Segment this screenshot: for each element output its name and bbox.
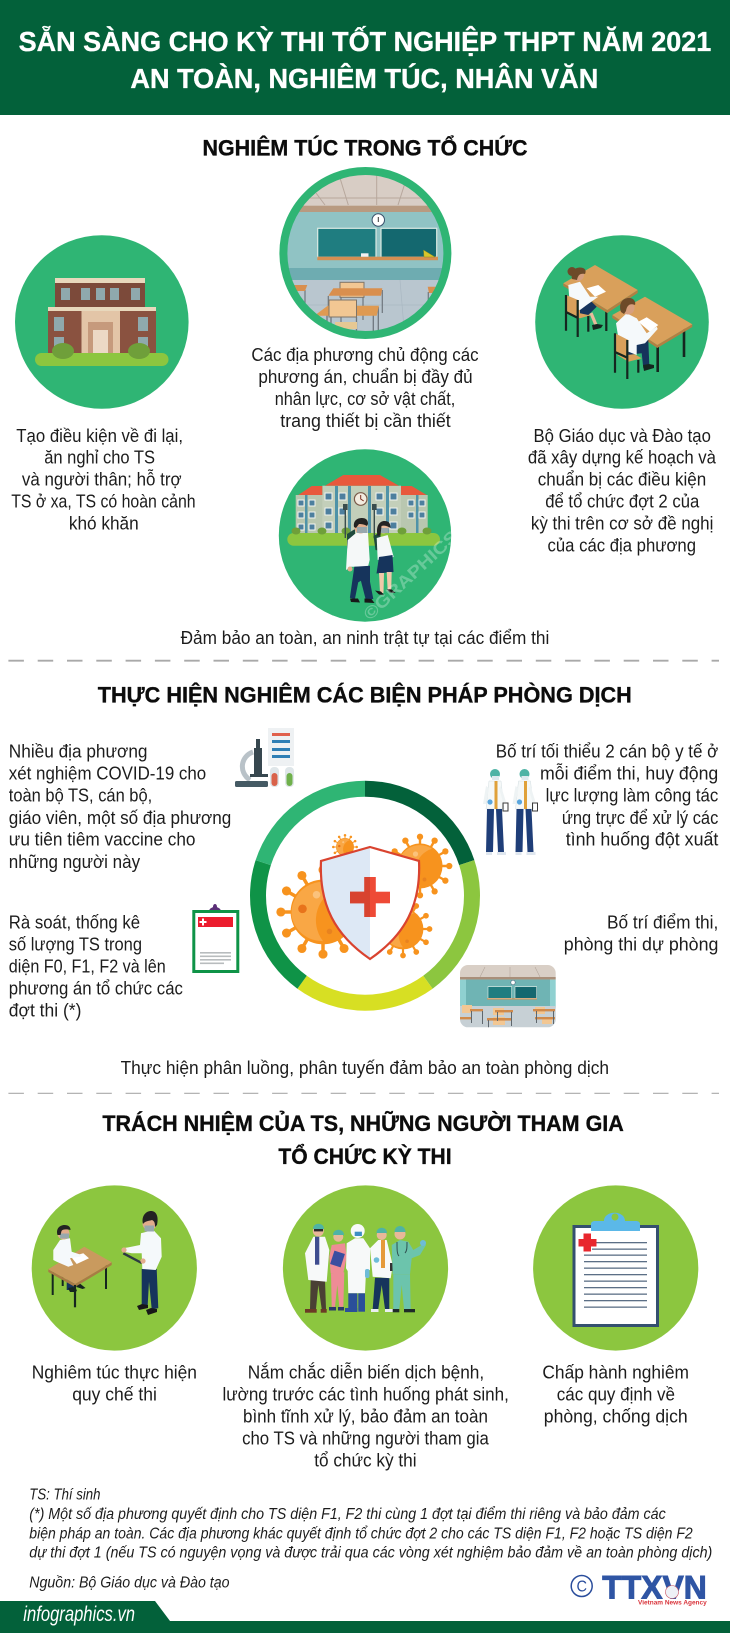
text: medical staff: ứng trực để xử lý các xyxy=(562,808,718,828)
icon: classroom circle xyxy=(279,167,452,340)
text: screening: phương án tổ chức các xyxy=(9,979,183,999)
title: AN TOÀN, NGHIÊM TÚC, NHÂN VĂN xyxy=(130,63,598,94)
header banner xyxy=(0,0,730,115)
text: students caption: đã xây dựng kế hoạch và xyxy=(528,448,717,468)
footer bar xyxy=(0,1601,730,1633)
text: medical staff: tình huống đột xuất xyxy=(566,830,718,850)
seated candidate and table xyxy=(48,1225,112,1307)
table 2 xyxy=(612,297,692,372)
heading: trách nhiệm xyxy=(102,1111,624,1169)
text: students caption: để tổ chức đợt 2 của xyxy=(545,492,700,512)
text: caption team: cho TS và những người tham gia xyxy=(242,1429,490,1449)
text: classroom caption: phương án, chuẩn bị đầy đủ xyxy=(258,367,473,387)
title: SẴN SÀNG CHO KỲ THI TỐT NGHIỆP THPT NĂM 2021 xyxy=(19,25,711,57)
standing supervisor xyxy=(121,1211,162,1315)
icon: medical team circle xyxy=(283,1185,448,1351)
source: Nguồn: Bộ Giáo dục và Đào tạo xyxy=(29,1575,230,1592)
icon: small classroom xyxy=(460,965,556,1028)
text: screening: đợt thi (*) xyxy=(9,1001,81,1021)
text: caption exam rules: Nghiêm túc thực hiện xyxy=(32,1362,197,1382)
text: medical staff xyxy=(496,742,718,850)
text: caption regulations xyxy=(542,1362,689,1426)
logo: TTXVN: Vietnam News Agency xyxy=(638,1599,707,1606)
text: classroom caption: nhân lực, cơ sở vật chất, xyxy=(275,389,455,409)
text: caption regulations: các quy định về xyxy=(557,1384,675,1404)
icon: school with students circle xyxy=(279,449,462,624)
text: caption exam rules xyxy=(32,1362,197,1404)
text: building caption xyxy=(11,426,196,534)
text: testing xyxy=(9,742,231,872)
text: students caption: kỳ thi trên cơ sở đề nghị xyxy=(531,514,713,534)
footer bar: infographics.vn xyxy=(23,1603,135,1626)
text: students caption: chuẩn bị các điều kiện xyxy=(538,470,706,490)
icon: two medical staff xyxy=(483,769,538,855)
text: building caption: và người thân; hỗ trợ xyxy=(22,468,182,490)
text: caption exam rules: quy chế thi xyxy=(72,1384,157,1404)
text: caption team: tổ chức kỳ thi xyxy=(314,1451,417,1471)
student 2 xyxy=(615,298,658,379)
text: building caption: ăn nghỉ cho TS xyxy=(44,448,155,468)
medic 2 xyxy=(329,1230,347,1310)
text: medical staff: lực lượng làm công tác xyxy=(546,786,718,806)
footnotes: (*) Một số địa phương quyết định cho TS diện F1, F2 thi cùng 1 đợt tại điểm thi riêng và bảo đảm các xyxy=(29,1506,666,1523)
text: students caption: Bộ Giáo dục và Đào tạo xyxy=(534,426,711,446)
icon: building circle xyxy=(15,235,189,409)
text: caption regulations: Chấp hành nghiêm xyxy=(542,1362,689,1382)
text: testing: xét nghiệm COVID-19 cho xyxy=(9,764,206,784)
text: routing caption: Thực hiện phân luồng, phân tuyến đảm bảo an toàn phòng dịch xyxy=(121,1058,609,1078)
heading: biện pháp phòng dịch: THỰC HIỆN NGHIÊM CÁC BIỆN PHÁP PHÒNG DỊCH xyxy=(98,683,632,708)
text: testing: những người này xyxy=(9,852,140,872)
text: classroom caption: trang thiết bị cần thiết xyxy=(280,411,451,431)
text: reserve rooms: Bố trí điểm thi, xyxy=(607,912,718,932)
heading: Nghiêm túc trong tổ chức: NGHIÊM TÚC TRONG TỔ CHỨC xyxy=(202,136,528,161)
boy xyxy=(346,518,374,603)
text: students caption xyxy=(528,426,717,556)
text: reserve rooms: phòng thi dự phòng xyxy=(564,935,718,955)
text: medical staff: mỗi điểm thi, huy động xyxy=(540,763,718,784)
desks and chairs xyxy=(291,282,440,332)
student 1 xyxy=(566,267,603,337)
icon: students at desks circle xyxy=(535,235,709,409)
text: safety caption: Đảm bảo an toàn, an ninh trật tự tại các điểm thi xyxy=(181,628,549,648)
medic 5 xyxy=(392,1226,426,1312)
icon: shield xyxy=(321,847,419,959)
girl xyxy=(374,521,396,595)
chart: ring with shield and viruses xyxy=(258,789,472,1003)
text: caption team: lường trước các tình huống phát sinh, xyxy=(222,1384,509,1404)
text: caption team: Nắm chắc diễn biến dịch bệnh, xyxy=(248,1361,484,1382)
text: screening: Rà soát, thống kê xyxy=(9,912,140,932)
medic 4 xyxy=(370,1228,395,1312)
text: caption team xyxy=(222,1361,509,1471)
text: screening xyxy=(9,912,183,1021)
logo: TTXVN: TTXVN xyxy=(602,1569,707,1605)
icon: medical clipboard circle xyxy=(533,1185,698,1351)
text: testing: toàn bộ TS, cán bộ, xyxy=(9,786,152,806)
text: classroom caption: Các địa phương chủ động các xyxy=(251,345,479,365)
text: caption regulations: phòng, chống dịch xyxy=(544,1406,688,1426)
icon: microscope xyxy=(235,728,294,787)
text: students caption: của các địa phương xyxy=(548,536,696,556)
medic 1 xyxy=(305,1224,329,1313)
text: classroom caption xyxy=(251,345,479,431)
text: testing: Nhiều địa phương xyxy=(9,742,147,762)
icon: exam check circle xyxy=(32,1185,197,1351)
text: caption team: bình tĩnh xử lý, bảo đảm an toàn xyxy=(243,1406,488,1426)
medic 3 xyxy=(345,1224,370,1312)
watermark: ©GRAPHICS xyxy=(360,527,462,624)
icon: clipboard green xyxy=(194,904,238,972)
text: reserve rooms xyxy=(564,912,718,955)
heading: trách nhiệm: TRÁCH NHIỆM CỦA TS, NHỮNG NGƯỜI THAM GIA xyxy=(102,1111,624,1136)
text: medical staff: Bố trí tối thiểu 2 cán bộ y tế ở xyxy=(496,742,718,762)
text: building caption: khó khăn xyxy=(69,514,139,534)
text: building caption: TS ở xa, TS có hoàn cảnh xyxy=(11,492,196,512)
text: testing: ưu tiên tiêm vaccine cho xyxy=(9,830,195,850)
text: testing: giáo viên, một số địa phương xyxy=(9,808,231,828)
icon: viruses xyxy=(276,834,452,959)
text: screening: diện F0, F1, F2 và lên xyxy=(9,957,166,977)
heading: trách nhiệm: TỔ CHỨC KỲ THI xyxy=(278,1144,452,1169)
text: building caption: Tạo điều kiện về đi lại, xyxy=(16,426,183,446)
footnotes xyxy=(29,1486,712,1562)
title xyxy=(19,25,711,94)
text: screening: số lượng TS trong xyxy=(9,935,142,955)
logo: TTXVN: C xyxy=(576,1579,587,1596)
footnotes: TS: Thí sinh xyxy=(29,1486,100,1503)
table 1 xyxy=(563,265,638,331)
